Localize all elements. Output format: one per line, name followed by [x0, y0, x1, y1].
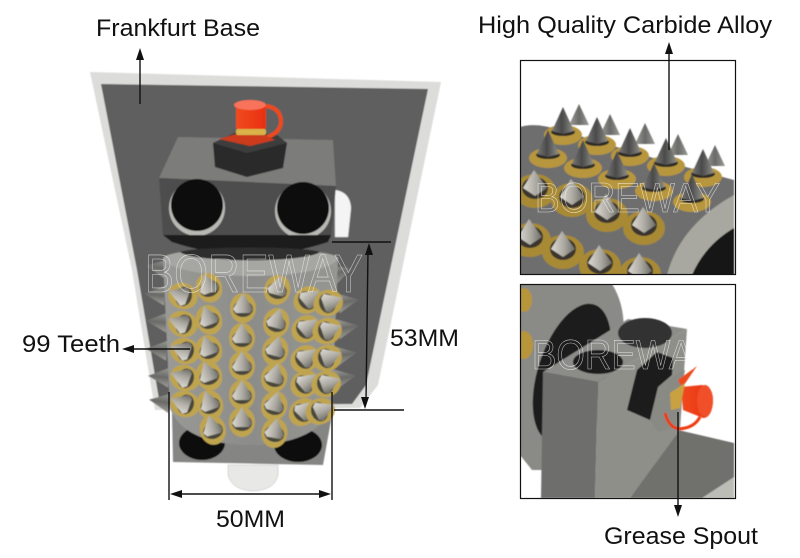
red cap	[665, 413, 700, 429]
watermark: panel 1: BOREWAY	[535, 174, 720, 221]
arrow: 99 teeth	[122, 345, 190, 353]
red grease cap	[219, 100, 281, 146]
panel: grease spout close-up	[515, 284, 736, 498]
base plate	[630, 430, 734, 498]
label: Grease Spout: Grease Spout	[604, 523, 758, 550]
hex grease nut	[213, 132, 287, 177]
nut	[627, 352, 673, 420]
watermark: main photo: BOREWAY	[145, 244, 363, 304]
white rear bolt	[335, 190, 351, 237]
photo: roller mounted on Frankfurt base	[90, 72, 441, 491]
upper mounting block	[159, 137, 336, 239]
label: 53MM: 53MM	[390, 325, 459, 352]
watermark: panel 2: BOREWAY	[532, 331, 715, 378]
label: Frankfurt Base: Frankfurt Base	[96, 15, 260, 42]
bottom bolt	[228, 465, 278, 491]
dimension: 53MM	[332, 242, 404, 410]
Frankfurt base plate	[90, 72, 441, 410]
label: High Quality Carbide Alloy: High Quality Carbide Alloy	[478, 12, 772, 39]
roller cylinder with 99 teeth	[143, 248, 361, 450]
panel: carbide teeth close-up	[520, 60, 736, 276]
arrow: Frankfurt Base	[136, 48, 144, 104]
collar	[682, 370, 686, 376]
roller and bearing disc	[520, 284, 624, 470]
arrow: grease spout	[674, 412, 682, 517]
label: 50MM: 50MM	[216, 506, 285, 533]
dimension: 50MM	[169, 392, 332, 500]
arrow: carbide alloy	[665, 42, 673, 150]
label: 99 Teeth: 99 Teeth	[22, 331, 120, 358]
roller top bearing	[163, 235, 331, 255]
square block	[543, 319, 687, 382]
lower mounting block	[172, 413, 332, 465]
